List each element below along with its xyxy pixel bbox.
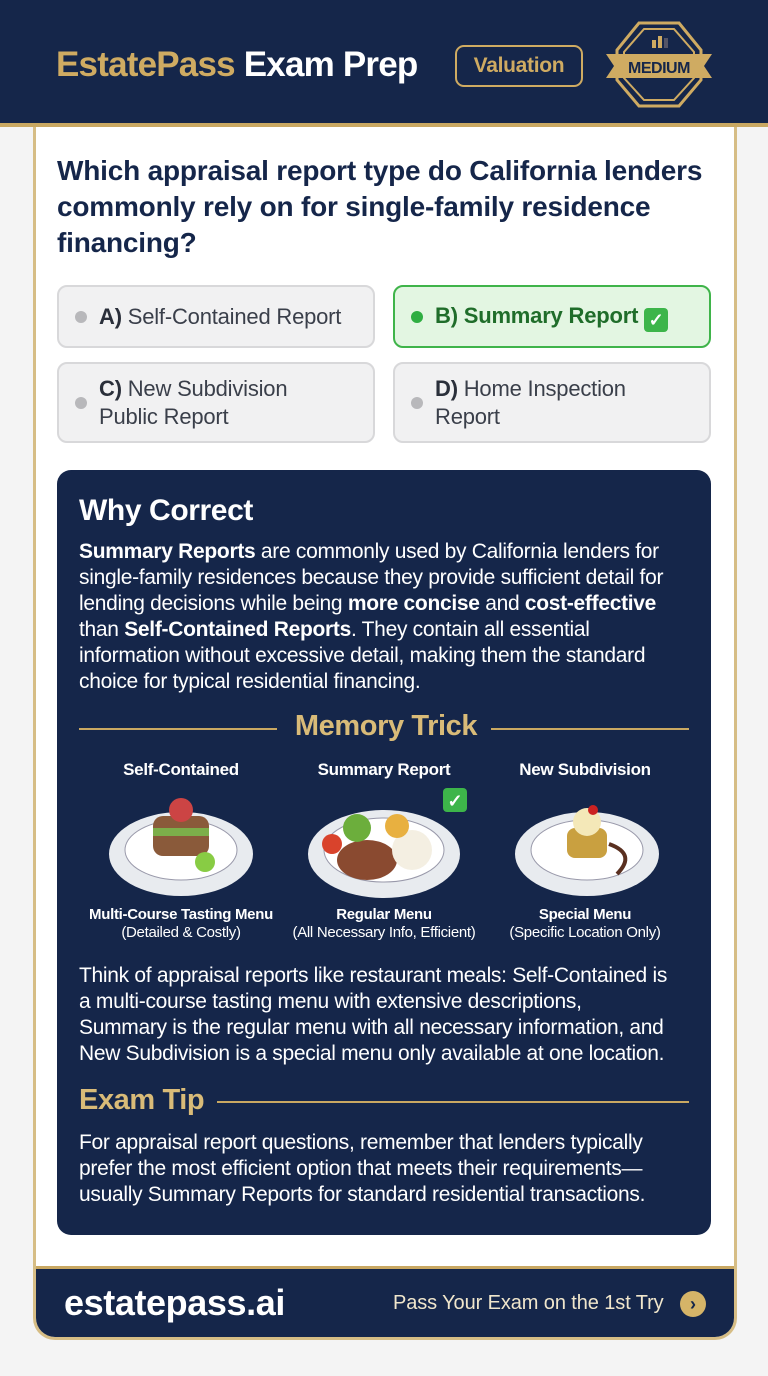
text: memory trick: Think of appraisal reports like restaurant meals: Self-Contained is [79,964,667,987]
text: memory trick: Summary is the regular menu with all necessary information, and [79,1016,664,1039]
illustration: three plates: New Subdivision [519,760,651,779]
illustration: three plates: ✓ [447,791,463,811]
illustration: three plates: Special Menu [539,906,631,923]
option B: ✓ [649,310,664,330]
illustration: three plates: (All Necessary Info, Efficient) [292,924,476,941]
option C: Public Report [99,404,228,428]
question: financing? [57,227,197,258]
option A [57,285,375,348]
header [0,0,768,127]
title: EstatePass Exam Prep [56,45,417,84]
option C [57,362,375,443]
option D: D) Home Inspection [435,376,626,400]
option B [393,285,711,348]
heading: exam tip: Exam Tip [79,1084,204,1116]
badge: valuation [455,45,583,87]
illustration: three plates: Summary Report [318,760,450,779]
question [57,155,702,258]
illustration: three plates: Self-Contained [123,760,239,779]
text: memory trick: a multi-course tasting menu with extensive descriptions, [79,990,582,1013]
text: why correct: Summary Reports are commonly used by California lenders for [79,540,659,563]
heading: memory trick: Memory Trick [295,710,477,742]
text: exam tip [79,1131,645,1206]
footer: Pass Your Exam on the 1st Try [393,1292,664,1314]
badge: valuation: Valuation [474,54,564,77]
illustration: three plates: (Detailed & Costly) [121,924,241,941]
option A: A) Self-Contained Report [99,304,341,328]
text: exam tip: prefer the most efficient option that meets their requirements— [79,1157,642,1180]
text: why correct: single-family residences because they provide sufficient detail for [79,566,663,589]
question: commonly rely on for single-family residence [57,191,650,222]
question: Which appraisal report type do California lenders [57,155,702,186]
text: why correct: information without excessive detail, making them the standard [79,644,645,667]
panel: explanation [57,470,711,1235]
illustration: three plates: Regular Menu [336,906,432,923]
text: exam tip: For appraisal report questions, remember that lenders typically [79,1131,643,1154]
heading: why correct: Why Correct [79,494,253,527]
footer [36,1266,734,1337]
option D [393,362,711,443]
text: exam tip: usually Summary Reports for standard residential transactions. [79,1183,645,1206]
text: why correct: choice for typical residential financing. [79,670,420,693]
text: why correct: than Self-Contained Reports. They contain all essential [79,618,590,641]
text: why correct [79,540,664,693]
badge: medium: MEDIUM [628,60,690,77]
illustration: three plates [89,760,661,941]
text: why correct: lending decisions while being more concise and cost-effective [79,592,656,615]
text: memory trick [79,964,667,1065]
option C: C) New Subdivision [99,376,287,400]
illustration: three plates: (Specific Location Only) [509,924,661,941]
option B: B) Summary Report [435,302,638,328]
footer: estatepass.ai [64,1282,285,1323]
illustration: three plates: Multi-Course Tasting Menu [89,906,273,923]
option D: Report [435,404,500,428]
footer: › [690,1294,696,1314]
badge: medium [606,22,712,108]
text: memory trick: New Subdivision is a special menu only available at one location. [79,1042,664,1065]
